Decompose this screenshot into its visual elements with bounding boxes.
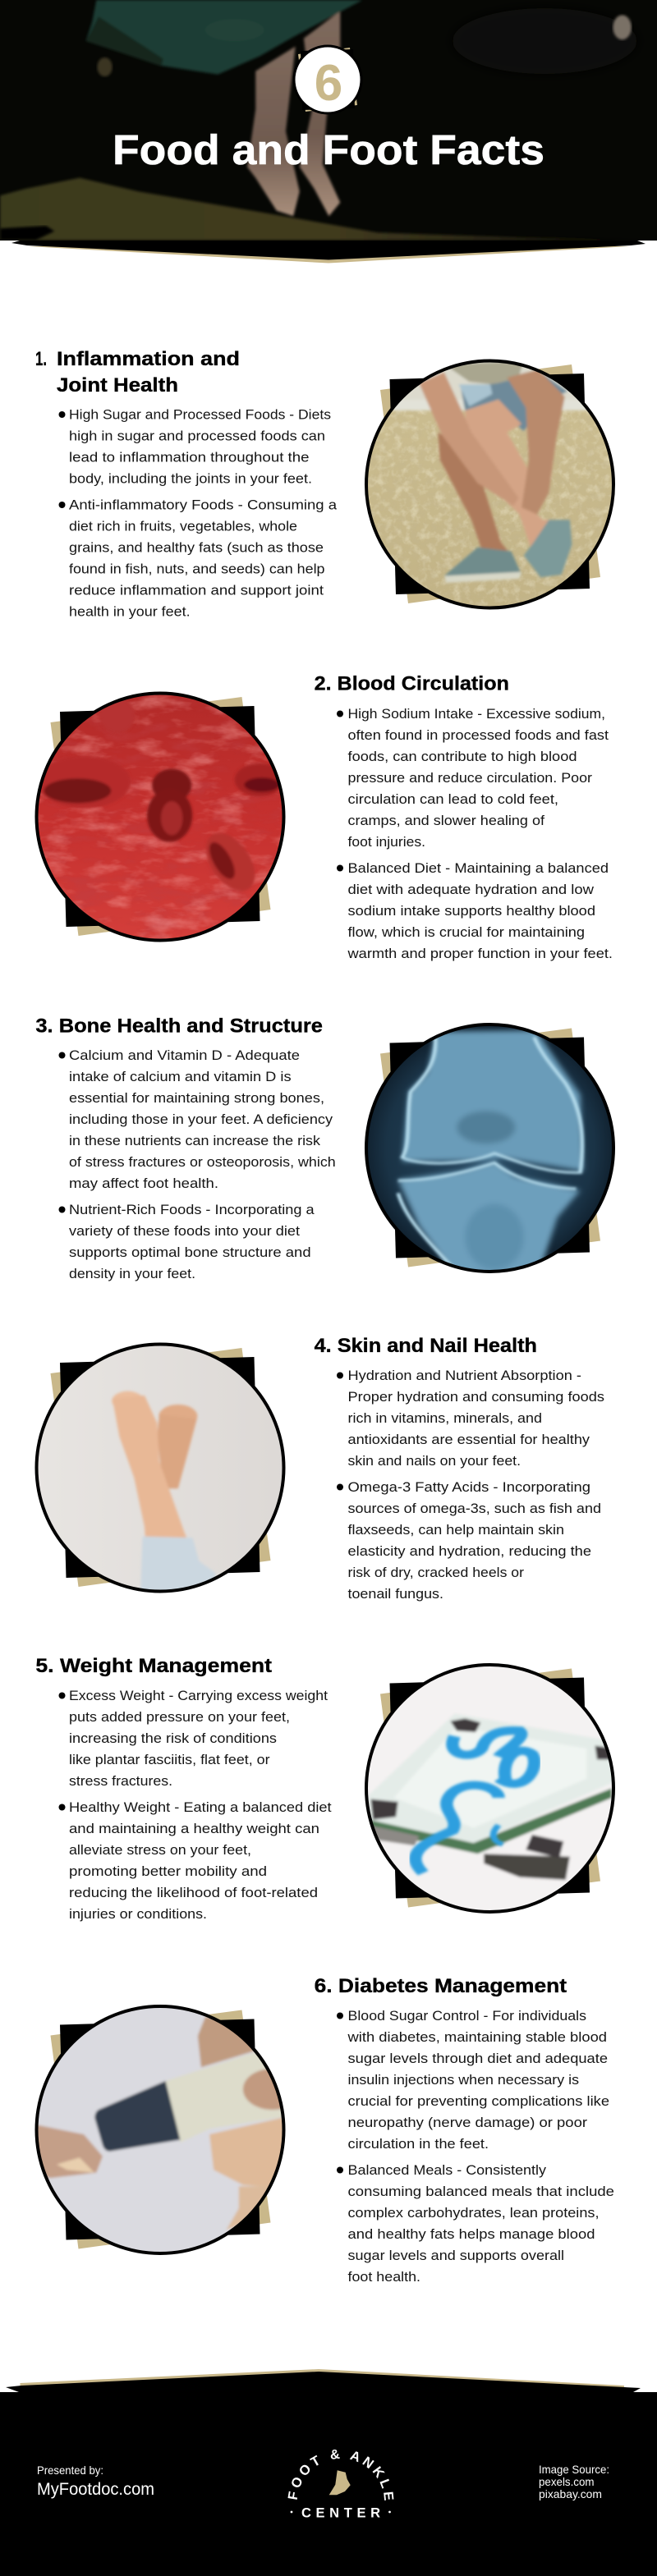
- bullet: blood sugar control: crucial for preventing complications like: [348, 2094, 609, 2109]
- bullet: balanced meals: foot health.: [348, 2270, 420, 2285]
- icon: foot: [329, 2470, 351, 2495]
- bullet: omega-3 fatty acids: [337, 1480, 601, 1602]
- heading: 6. Diabetes Management: [315, 1975, 567, 1997]
- heading: Inflammation and: [57, 348, 240, 370]
- hero pointed divider: [11, 241, 646, 263]
- bullet: hydration and nutrient absorption: skin and nails on your feet.: [348, 1454, 521, 1469]
- bullet: calcium and vitamin D: of stress fractures or osteoporosis, which: [69, 1155, 336, 1170]
- bullet: omega-3 fatty acids: flaxseeds, can help maintain skin: [348, 1523, 564, 1538]
- heading: 3. Bone Health and Structure: [35, 1015, 323, 1037]
- bullet: balanced meals: sugar levels and supports overall: [348, 2248, 564, 2263]
- photo: lancet device between fingers: [34, 2005, 286, 2255]
- bullet: excess weight: puts added pressure on your feet,: [69, 1710, 290, 1725]
- bullet: balanced meals: consuming balanced meals that include: [348, 2184, 614, 2199]
- bullet: anti-inflammatory foods: grains, and healthy fats (such as those: [69, 541, 324, 556]
- panel: blood circulation: [30, 673, 613, 961]
- photo: knee x-ray: [361, 1020, 620, 1275]
- bullet: omega-3 fatty acids: risk of dry, cracked heels or: [348, 1565, 525, 1580]
- bullet: nutrient-rich foods: Nutrient-Rich Foods - Incorporating a: [69, 1203, 315, 1217]
- bullet: anti-inflammatory foods: [59, 498, 338, 620]
- photo: red blood cells: [30, 687, 293, 947]
- bullet: anti-inflammatory foods: Anti-inflammatory Foods - Consuming a: [69, 498, 338, 513]
- presented by: MyFootdoc.com: [37, 2480, 154, 2499]
- heading: 1.: [35, 348, 47, 370]
- bullet: anti-inflammatory foods: reduce inflammation and support joint: [69, 584, 324, 598]
- bullet: healthy weight: alleviate stress on your feet,: [69, 1843, 251, 1858]
- bullet: excess weight: stress fractures.: [69, 1774, 172, 1789]
- image source: [539, 2463, 609, 2500]
- panel: diabetes management: [30, 1975, 614, 2285]
- footer: [0, 2369, 657, 2576]
- title: Food and Foot Facts: [113, 126, 544, 173]
- bullet: excess weight: like plantar fasciitis, flat feet, or: [69, 1753, 270, 1767]
- logo: foot and ankle center: CENTER: [301, 2506, 380, 2521]
- bullet: nutrient-rich foods: [59, 1203, 315, 1281]
- bullet: calcium and vitamin D: including those in your feet. A deficiency: [69, 1112, 333, 1127]
- bullet: blood sugar control: insulin injections when necessary is: [348, 2073, 579, 2088]
- image source: Image Source:: [539, 2463, 609, 2476]
- bullet: high sugar: body, including the joints in your feet.: [69, 472, 312, 487]
- bullet: blood sugar control: with diabetes, maintaining stable blood: [347, 2030, 607, 2045]
- bullet: healthy weight: reducing the likelihood of foot-related: [69, 1886, 318, 1900]
- bullet: blood sugar control: circulation in the feet.: [348, 2137, 489, 2152]
- presented by: [37, 2464, 154, 2499]
- bullet: balanced diet: Balanced Diet - Maintaining a balanced: [348, 861, 609, 876]
- bullet: anti-inflammatory foods: diet rich in fruits, vegetables, whole: [69, 520, 297, 534]
- bullet: high sodium intake: pressure and reduce circulation. Poor: [348, 771, 593, 786]
- bullet: balanced diet: warmth and proper function in your feet.: [347, 947, 613, 961]
- hero photo: hammock and feet over grass: [0, 0, 657, 241]
- bullet: balanced meals: Balanced Meals - Consistently: [348, 2163, 547, 2178]
- heading: 4. Skin and Nail Health: [315, 1335, 537, 1357]
- bullet: calcium and vitamin D: may affect foot health.: [69, 1176, 218, 1191]
- bullet: omega-3 fatty acids: toenail fungus.: [348, 1587, 443, 1602]
- panel: bone health and structure: [35, 1015, 620, 1281]
- bullet: calcium and vitamin D: in these nutrients can increase the risk: [69, 1134, 321, 1148]
- bullet: nutrient-rich foods: supports optimal bone structure and: [69, 1245, 311, 1260]
- logo: foot and ankle center: FOOT & ANKLE: [287, 2450, 394, 2500]
- bullet: blood sugar control: sugar levels through diet and adequate: [348, 2051, 608, 2066]
- bullet: hydration and nutrient absorption: [337, 1368, 604, 1469]
- image source: pixabay.com: [539, 2487, 602, 2500]
- bullet: balanced meals: complex carbohydrates, lean proteins,: [348, 2206, 600, 2221]
- bullet: high sodium intake: often found in processed foods and fast: [348, 728, 609, 743]
- bullet: calcium and vitamin D: essential for maintaining strong bones,: [69, 1091, 324, 1106]
- photo: scale and measuring tape: [361, 1661, 620, 1915]
- hero banner: [0, 0, 657, 241]
- number badge: [294, 46, 361, 113]
- heading: Joint Health: [57, 374, 178, 396]
- bullet: omega-3 fatty acids: elasticity and hydration, reducing the: [348, 1544, 591, 1559]
- photo: raised feet against wall: [30, 1338, 293, 1598]
- heading: 5. Weight Management: [35, 1655, 272, 1677]
- bullet: healthy weight: injuries or conditions.: [69, 1907, 207, 1922]
- bullet: balanced meals: [337, 2163, 614, 2285]
- bullet: high sodium intake: foods, can contribute to high blood: [348, 749, 577, 764]
- bullet: blood sugar control: [337, 2009, 609, 2152]
- bullet: omega-3 fatty acids: sources of omega-3s, such as fish and: [348, 1501, 601, 1516]
- heading: 2. Blood Circulation: [315, 673, 509, 695]
- bullet: high sodium intake: circulation can lead to cold feet,: [348, 792, 558, 807]
- bullet: excess weight: increasing the risk of conditions: [69, 1731, 277, 1746]
- bullet: calcium and vitamin D: [59, 1048, 336, 1191]
- bullet: healthy weight: promoting better mobility and: [69, 1864, 267, 1879]
- presented by: Presented by:: [37, 2464, 103, 2477]
- heading: [35, 348, 240, 396]
- bullet: high sodium intake: [337, 707, 609, 850]
- bullet: high sodium intake: High Sodium Intake - Excessive sodium,: [348, 707, 605, 722]
- panel: skin and nail health: [30, 1335, 604, 1602]
- bullet: excess weight: [59, 1689, 328, 1789]
- bullet: high sugar: lead to inflammation throughout the: [69, 451, 309, 465]
- bullet: high sodium intake: foot injuries.: [348, 835, 425, 850]
- bullet: excess weight: Excess Weight - Carrying excess weight: [69, 1689, 328, 1703]
- bullet: high sugar: High Sugar and Processed Foods - Diets: [69, 408, 331, 423]
- panel: inflammation and joint health: [35, 348, 620, 620]
- bullet: blood sugar control: Blood Sugar Control - For individuals: [348, 2009, 586, 2024]
- bullet: high sugar: [59, 408, 331, 487]
- bullet: hydration and nutrient absorption: Hydration and Nutrient Absorption -: [348, 1368, 581, 1383]
- bullet: anti-inflammatory foods: health in your feet.: [69, 605, 191, 620]
- panel: weight management: [35, 1655, 620, 1922]
- bullet: healthy weight: [59, 1800, 332, 1922]
- bullet: omega-3 fatty acids: Omega-3 Fatty Acids - Incorporating: [348, 1480, 590, 1495]
- image source: pexels.com: [539, 2475, 595, 2488]
- bullet: healthy weight: and maintaining a healthy weight can: [69, 1822, 319, 1836]
- bullet: balanced diet: sodium intake supports healthy blood: [348, 904, 595, 919]
- bullet: hydration and nutrient absorption: Proper hydration and consuming foods: [348, 1390, 604, 1405]
- bullet: high sugar: high in sugar and processed foods can: [69, 429, 325, 444]
- photo: runner holding calf: [361, 355, 620, 613]
- bullet: hydration and nutrient absorption: antioxidants are essential for healthy: [348, 1432, 590, 1447]
- bullet: blood sugar control: neuropathy (nerve damage) or poor: [348, 2115, 588, 2130]
- bullet: balanced diet: flow, which is crucial for maintaining: [348, 925, 585, 940]
- bullet: balanced meals: and healthy fats helps manage blood: [348, 2227, 595, 2242]
- number badge: 6: [315, 55, 342, 112]
- bullet: hydration and nutrient absorption: rich in vitamins, minerals, and: [348, 1411, 542, 1426]
- bullet: high sodium intake: cramps, and slower healing of: [348, 814, 544, 828]
- bullet: nutrient-rich foods: variety of these foods into your diet: [69, 1224, 300, 1239]
- bullet: anti-inflammatory foods: found in fish, nuts, and seeds) can help: [69, 562, 325, 577]
- bullet: nutrient-rich foods: density in your feet.: [69, 1267, 195, 1281]
- bullet: balanced diet: [337, 861, 613, 961]
- bullet: calcium and vitamin D: intake of calcium and vitamin D is: [69, 1070, 292, 1084]
- bullet: healthy weight: Healthy Weight - Eating a balanced diet: [69, 1800, 332, 1815]
- bullet: balanced diet: diet with adequate hydration and low: [348, 882, 594, 897]
- bullet: calcium and vitamin D: Calcium and Vitamin D - Adequate: [69, 1048, 300, 1063]
